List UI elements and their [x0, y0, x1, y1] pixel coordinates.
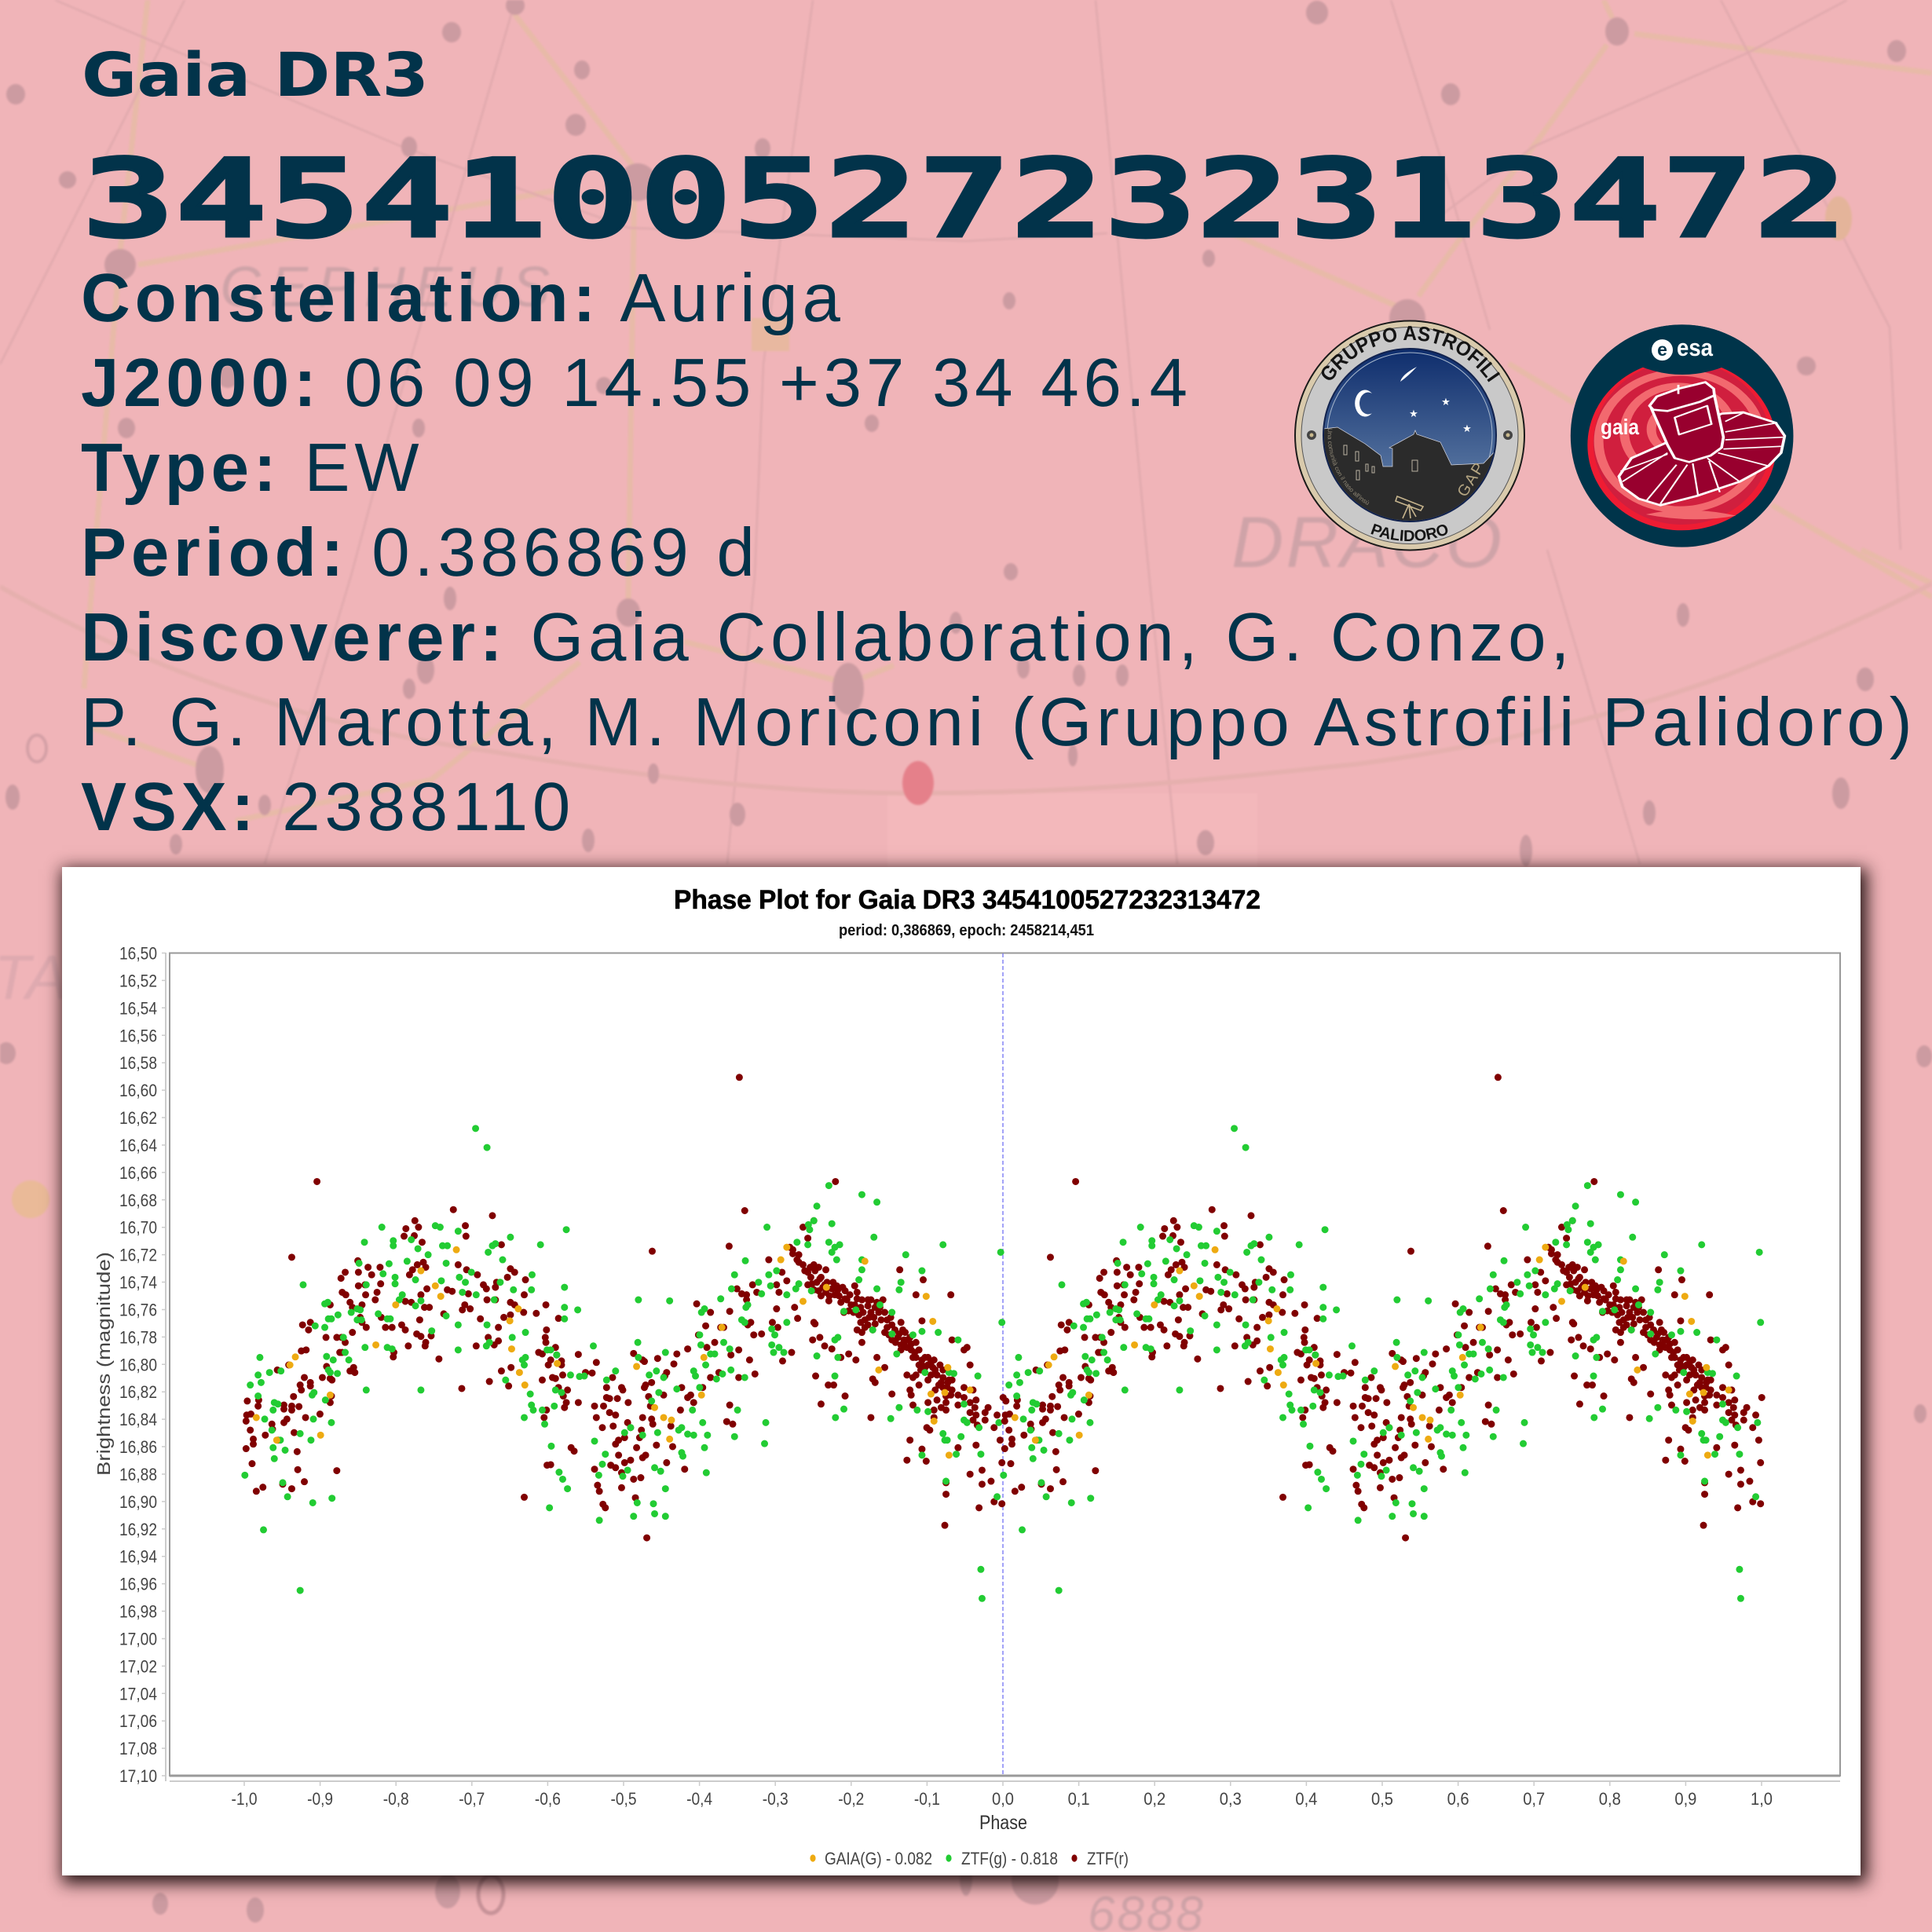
- logo: Gruppo Astrofili Palidoro: ★: [1441, 397, 1451, 408]
- y axis tick labels: 16,88: [119, 1465, 157, 1484]
- spacecraft: telescope cylinder: [1652, 395, 1723, 462]
- legend: [810, 1849, 1129, 1868]
- y axis tick labels: 16,90: [119, 1492, 157, 1512]
- y axis tick labels: 16,64: [119, 1136, 157, 1155]
- x axis tick labels: 0,1: [1068, 1789, 1090, 1809]
- star chart background: CEPHEUS: [220, 256, 559, 319]
- x axis tick labels: -0,3: [763, 1789, 789, 1809]
- chart subtitle: period: 0,386869, epoch: 2458214,451: [839, 922, 1094, 939]
- field: discoverer continued: P. G. Marotta, M. Moriconi (Gruppo Astrofili Palidoro): [81, 684, 1916, 760]
- x axis tick labels: -0,8: [383, 1789, 409, 1809]
- y axis tick labels: 16,80: [119, 1355, 157, 1374]
- y axis tick labels: 16,78: [119, 1327, 157, 1347]
- y axis title: Brightness (magnitude): [93, 1252, 114, 1476]
- scatter points: phase -1 to 0: [245, 1078, 1003, 1598]
- x axis tick labels: 0,5: [1371, 1789, 1393, 1809]
- x axis tick labels: -0,6: [535, 1789, 561, 1809]
- x axis tick labels: -1,0: [231, 1789, 258, 1809]
- x axis tick labels: 0,4: [1295, 1789, 1317, 1809]
- logo: ESA Gaia mission patch: [1571, 324, 1794, 547]
- y axis tick labels: [119, 944, 157, 1786]
- heading: Gaia DR3: Gaia DR3: [82, 41, 429, 111]
- x axis tick labels: -0,2: [838, 1789, 864, 1809]
- x axis tick labels: -0,4: [686, 1789, 712, 1809]
- x axis title: Phase: [979, 1812, 1027, 1834]
- icon: shooting star: [1400, 367, 1417, 382]
- y axis tick labels: 16,54: [119, 998, 157, 1018]
- legend: ZTF(g) - 0.818: [961, 1849, 1058, 1868]
- y axis tick labels: 16,76: [119, 1301, 157, 1319]
- y axis tick labels: 17,08: [119, 1739, 157, 1758]
- y axis tick labels: 16,66: [119, 1163, 157, 1183]
- x axis tick labels: 0,6: [1447, 1789, 1469, 1809]
- y axis tick labels: 16,82: [119, 1382, 157, 1402]
- x axis tick labels: 0,7: [1523, 1789, 1545, 1809]
- field: constellation: Constellation: Auriga: [81, 260, 845, 336]
- icon: telescope: [1396, 496, 1423, 518]
- y axis tick labels: 16,70: [119, 1218, 157, 1238]
- y axis tick labels: 17,04: [119, 1684, 157, 1703]
- star chart background: DRACO: [1231, 503, 1504, 583]
- y axis tick labels: 16,96: [119, 1575, 157, 1594]
- plot frame and axes: [162, 953, 1840, 1786]
- field: type: Type: EW: [81, 430, 423, 506]
- legend: ZTF(r): [1087, 1849, 1129, 1868]
- spacecraft: sunshield: [1619, 382, 1784, 505]
- x axis tick labels: 0,9: [1674, 1789, 1696, 1809]
- y axis tick labels: 16,60: [119, 1081, 157, 1100]
- field: J2000: J2000: 06 09 14.55 +37 34 46.4: [81, 345, 1192, 421]
- logo: Gruppo Astrofili Palidoro: PALIDORO: [1370, 523, 1448, 541]
- y axis tick labels: 16,92: [119, 1520, 157, 1539]
- logo: Gruppo Astrofili Palidoro: Una comunità con il naso all'insù: [1327, 429, 1370, 505]
- y axis tick labels: 16,72: [119, 1246, 157, 1265]
- x axis tick labels: 0,3: [1220, 1789, 1242, 1809]
- series: GAIA(G): [256, 1247, 970, 1455]
- label: gaia: gaia: [1601, 415, 1639, 439]
- field: VSX: VSX: 2388110: [81, 769, 575, 845]
- x axis tick labels: -0,9: [307, 1789, 333, 1809]
- series: ZTF(g): [245, 1129, 1002, 1598]
- field: period: Period: 0.386869 d: [81, 514, 759, 591]
- heading: source id: 3454100527232313472: [82, 136, 1847, 262]
- y axis tick labels: 17,00: [119, 1629, 157, 1649]
- title and metadata block: [81, 41, 1916, 845]
- icon: crescent moon: [1355, 390, 1372, 416]
- logo: Gruppo Astrofili Palidoro: ★: [1409, 408, 1418, 420]
- y axis tick labels: 16,56: [119, 1026, 157, 1045]
- logo: ESA Gaia mission patch: e: [1657, 339, 1667, 360]
- series: ZTF(r): [246, 1078, 1003, 1538]
- silhouette: Palidoro village: [1324, 427, 1494, 521]
- y axis tick labels: 16,94: [119, 1547, 157, 1567]
- x axis tick labels: 0,0: [992, 1789, 1014, 1809]
- chart title: Phase Plot for Gaia DR3 3454100527232313472: [674, 885, 1261, 915]
- x axis tick labels: -0,5: [611, 1789, 636, 1809]
- label: esa: esa: [1677, 334, 1714, 361]
- logo: Gruppo Astrofili Palidoro: GRUPPO ASTROFILI: [1321, 326, 1500, 382]
- y axis tick labels: 17,10: [119, 1766, 157, 1786]
- x axis tick labels: -0,7: [459, 1789, 485, 1809]
- x axis tick labels: 0,8: [1599, 1789, 1621, 1809]
- y axis tick labels: 16,68: [119, 1191, 157, 1210]
- x axis tick labels: -0,1: [914, 1789, 940, 1809]
- y axis tick labels: 16,50: [119, 944, 157, 963]
- logo: Gruppo Astrofili Palidoro: [1294, 320, 1525, 551]
- logo: Gruppo Astrofili Palidoro: GAP: [1454, 459, 1489, 500]
- icon: esa roundel: [1652, 339, 1673, 360]
- y axis tick labels: 16,98: [119, 1602, 157, 1621]
- y axis tick labels: 16,58: [119, 1053, 157, 1073]
- panel: phase plot: [62, 867, 1861, 1875]
- x axis tick labels: 0,2: [1143, 1789, 1165, 1809]
- legend: GAIA(G) - 0.082: [825, 1849, 932, 1868]
- y axis tick labels: 16,74: [119, 1272, 157, 1293]
- scatter points: phase 0 to 1 (repeat): [1004, 1078, 1762, 1598]
- x axis tick labels: [231, 1789, 1773, 1809]
- y axis tick labels: 17,06: [119, 1711, 157, 1731]
- y axis tick labels: 16,52: [119, 971, 157, 990]
- y axis tick labels: 16,86: [119, 1437, 157, 1457]
- y axis tick labels: 17,02: [119, 1656, 157, 1676]
- logo: Gruppo Astrofili Palidoro: ★: [1462, 423, 1472, 435]
- y axis tick labels: 16,62: [119, 1108, 157, 1128]
- x axis tick labels: 1,0: [1751, 1789, 1773, 1809]
- field: discoverer: Discoverer: Gaia Collaboration, G. Conzo,: [81, 599, 1574, 675]
- y axis tick labels: 16,84: [119, 1410, 157, 1429]
